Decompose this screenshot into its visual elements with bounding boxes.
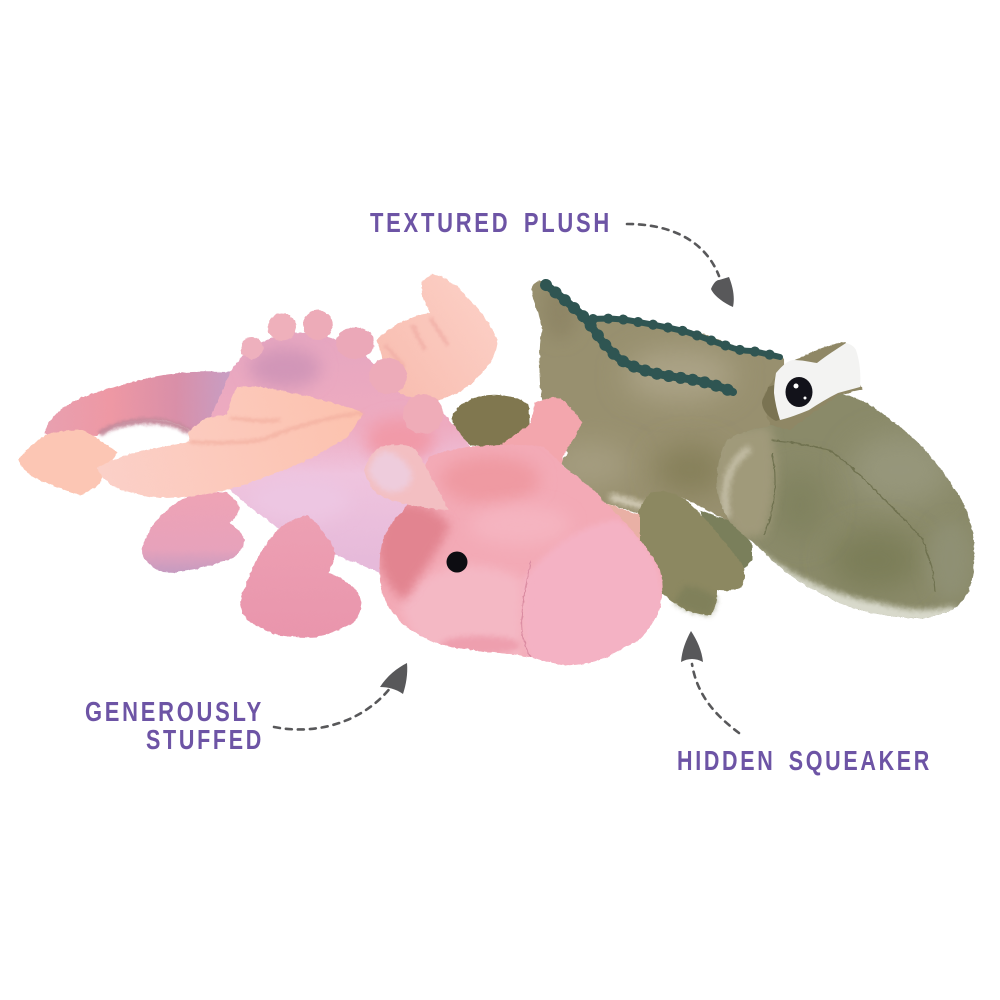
dragon tail (45, 372, 240, 440)
dragon front wing fold (190, 413, 363, 443)
label: textured plush: TEXTURED PLUSH (370, 207, 612, 238)
dragon eye (446, 552, 468, 572)
alligator inner foot (700, 510, 752, 570)
alligator foot shade (674, 585, 717, 615)
alligator snout (717, 393, 974, 618)
alligator eye (762, 343, 860, 421)
arrow: textured plush (627, 224, 734, 307)
label: generously stuffed (85, 696, 264, 755)
label: generously stuffed: GENEROUSLY (85, 696, 264, 727)
alligator back leg (452, 395, 530, 450)
dragon spine bumps (241, 310, 443, 434)
plush toy: green alligator (452, 280, 974, 630)
alligator front leg (633, 492, 745, 615)
dragon back leg (142, 492, 245, 572)
alligator body (531, 281, 785, 530)
dragon front wing (97, 386, 363, 498)
dragon tail tip (18, 430, 117, 495)
dragon right ear (500, 398, 582, 470)
dragon head (380, 445, 662, 665)
alligator head top (762, 342, 862, 430)
dragon back wing folds (385, 318, 448, 368)
alligator spine ridge (546, 285, 780, 392)
dragon tail inner shadow (100, 421, 190, 434)
arrow: generously stuffed (274, 663, 407, 729)
dragon front leg (240, 515, 362, 637)
dragon back wing (377, 275, 497, 408)
label: generously stuffed: STUFFED (146, 724, 264, 755)
plush toy: pink dragon (18, 275, 664, 670)
dragon body (205, 333, 510, 590)
label: hidden squeaker: HIDDEN SQUEAKER (677, 745, 932, 776)
dragon left ear (364, 445, 448, 510)
arrow: hidden squeaker (681, 631, 739, 733)
dragon under-sliver (605, 503, 640, 545)
